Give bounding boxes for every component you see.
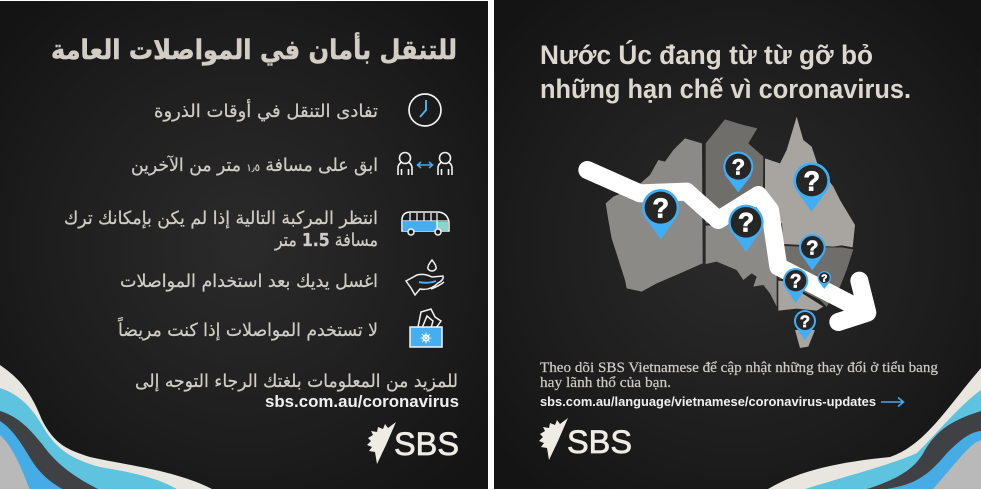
icon: clock: [409, 94, 441, 126]
heading: Nước Úc đang từ từ gỡ bỏ: [540, 39, 873, 70]
pin: Queensland: ?: [803, 165, 820, 196]
icon: bus: [402, 212, 449, 235]
text: more information: للمزيد من المعلومات بلغتك الرجاء التوجه إلى: [135, 371, 458, 392]
pin: Queensland: [793, 162, 830, 212]
logo: SBS: [539, 418, 632, 460]
pin: Western Australia: ?: [652, 192, 669, 223]
pin: Northern Territory: ?: [732, 155, 745, 180]
pin: New South Wales: ?: [806, 238, 818, 260]
pin: New South Wales: [799, 234, 826, 270]
logo: SBS: SBS: [394, 426, 459, 462]
map of Australia with falling arrow and pins: [587, 117, 867, 348]
text: avoid peak hours: تفادى التنقل في أوقات الذروة: [154, 99, 378, 122]
logo: SBS: SBS: [567, 424, 632, 460]
map: Australia states: [606, 117, 855, 348]
title: للتنقل بأمان في المواصلات العامة: [51, 32, 457, 66]
icon: washing hand: [406, 260, 444, 295]
pin: Northern Territory: [723, 152, 753, 192]
pin: South Australia: ?: [738, 208, 754, 238]
text: keep distance: ابق على مسافة ١٫٥ متر من الآخرين: [131, 154, 378, 176]
decorative wave: bottom-left corner: [0, 365, 214, 490]
text: wait for next vehicle: [64, 208, 378, 251]
panel: Arabic public transport advice: [0, 1, 488, 490]
text: follow SBS Vietnamese: [540, 360, 938, 391]
text: follow SBS Vietnamese: Theo dõi SBS Vietnamese để cập nhật những thay đổi ở tiểu bang: [540, 360, 938, 376]
pins: question marks: [642, 152, 831, 340]
heading: [540, 39, 911, 104]
pin: Tasmania: [794, 310, 816, 340]
icon: tissue box: [410, 309, 442, 347]
panel: Vietnamese restrictions map: [494, 0, 981, 489]
decorative wave: bottom-right corner: [768, 368, 981, 489]
falling arrow: [587, 170, 867, 322]
text: wait for next vehicle: انتظر المركبة التالية إذا لم يكن بإمكانك ترك: [64, 208, 378, 229]
pin: Victoria: ?: [790, 272, 801, 293]
icon: two people with distance arrow: [398, 152, 452, 175]
link: sbs.com.au/coronavirus: sbs.com.au/coronavirus: [265, 392, 459, 411]
pin: South Australia: [728, 205, 764, 252]
icon: blue arrow: [881, 398, 904, 406]
link: coronavirus updates: sbs.com.au/language/vietnamese/coronavirus-updates: [540, 394, 876, 409]
text: wash hands: اغسل يديك بعد استخدام المواصلات: [120, 271, 378, 292]
text: do not use if sick: لا تستخدم المواصلات إذا كنت مريضاً: [117, 317, 378, 341]
pin: Victoria: [783, 268, 808, 303]
pin: Western Australia: [642, 189, 679, 239]
pin: Tasmania: ?: [800, 312, 810, 331]
heading: những hạn chế vì coronavirus.: [540, 74, 911, 104]
logo: SBS: [367, 422, 459, 464]
text: follow SBS Vietnamese: hay lãnh thổ của bạn.: [540, 375, 671, 391]
pin: ACT: ?: [821, 273, 827, 284]
text: wait for next vehicle: مسافة 1.5 متر: [274, 230, 378, 251]
pin: ACT: [818, 271, 831, 289]
